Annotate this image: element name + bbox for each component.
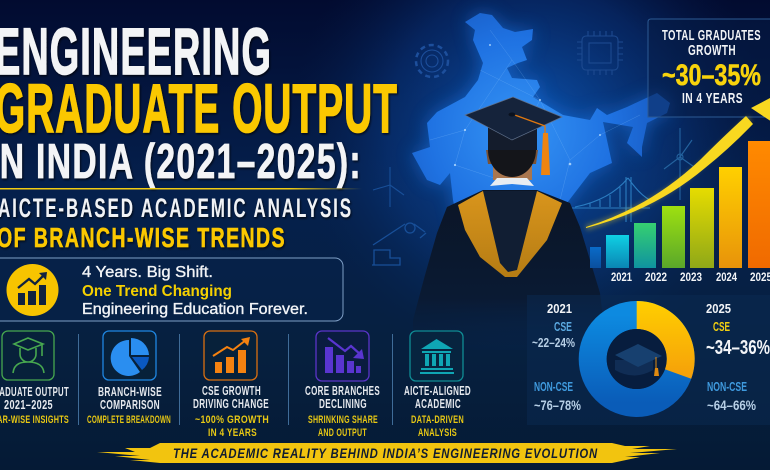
- panel: total graduates growth: [648, 19, 770, 117]
- donut chart: [593, 301, 695, 403]
- subtitle: [0, 193, 353, 253]
- bottom banner: THE ACADEMIC REALITY BEHIND INDIA’S ENGINEERING EVOLUTION: [173, 445, 598, 461]
- icon: gear outline: [416, 45, 448, 77]
- icon: institution: [410, 331, 463, 381]
- icon: rising bars: [204, 331, 257, 380]
- ears: [486, 150, 538, 164]
- icon: pie chart: [103, 331, 156, 380]
- 2021 cse value: ~22–24%: [532, 335, 575, 350]
- callout line 2: One Trend Changing: [82, 283, 232, 300]
- feature: core branches: [305, 331, 380, 439]
- sublabel: IN 4 YEARS: [208, 427, 257, 439]
- gown: [413, 190, 606, 345]
- sublabel: DATA-DRIVEN: [411, 414, 464, 426]
- icon: wind turbine right: [664, 128, 697, 200]
- 2021 non-cse label: NON-CSE: [534, 379, 573, 394]
- head hair: [488, 123, 536, 177]
- 2021 year: 2021: [547, 301, 572, 316]
- 2025 non-cse label: NON-CSE: [707, 379, 747, 394]
- growth arrow: [586, 97, 770, 228]
- tassel: [541, 133, 550, 175]
- year labels: 2021: [611, 272, 632, 284]
- 2021 non-cse value: ~76–78%: [534, 397, 581, 413]
- gold hood: [458, 191, 562, 277]
- collar: [490, 178, 534, 186]
- 2021 cse label: CSE: [554, 319, 572, 334]
- year labels: [611, 272, 770, 284]
- cap band: [488, 125, 537, 150]
- sublabel: ANALYSIS: [418, 427, 457, 439]
- subtitle line 1: AICTE-BASED ACADEMIC ANALYSIS: [0, 193, 353, 223]
- panel line 2: GROWTH: [688, 43, 736, 59]
- label: COMPARISON: [100, 398, 160, 412]
- year labels: 2023: [680, 272, 702, 284]
- year labels: 2024: [716, 272, 737, 284]
- year labels: 2022: [645, 272, 667, 284]
- callout box: [0, 258, 343, 321]
- India map: [412, 13, 670, 290]
- callout line 1: 4 Years. Big Shift.: [82, 264, 213, 281]
- panel line 4: IN 4 YEARS: [682, 91, 743, 107]
- mortarboard: [465, 97, 562, 140]
- sublabel: ~100% GROWTH: [195, 414, 269, 426]
- 2025 non-cse value: ~64–66%: [707, 397, 756, 413]
- icon: wind turbine left: [373, 167, 404, 207]
- gown centre back: [483, 191, 537, 272]
- sublabel: SHRINKING SHARE: [308, 414, 378, 426]
- sublabel: COMPLETE BREAKDOWN: [87, 414, 171, 426]
- 2025 cse label: CSE: [713, 319, 730, 334]
- bottom banner: [97, 443, 677, 463]
- title: [0, 14, 398, 189]
- icon: falling bars: [316, 331, 369, 381]
- icon: microchip outline: [577, 31, 623, 75]
- icon: robot arm: [372, 223, 426, 265]
- callout line 3: Engineering Education Forever.: [82, 301, 308, 318]
- feature: graduate output: [0, 331, 69, 426]
- icon: growth chart badge: [6, 264, 58, 316]
- icon: cap in donut: [615, 344, 662, 376]
- label: 2021–2025: [4, 398, 53, 412]
- cord: [512, 114, 545, 133]
- panel: cse share donut: [527, 295, 770, 425]
- feature: cse growth: [193, 331, 269, 439]
- label: DRIVING CHANGE: [193, 397, 269, 411]
- label: CSE GROWTH: [202, 384, 261, 398]
- label: BRANCH-WISE: [98, 385, 162, 399]
- neck: [493, 165, 532, 180]
- label: ACADEMIC: [415, 397, 461, 411]
- label: CORE BRANCHES: [305, 384, 380, 398]
- label: AICTE-ALIGNED: [404, 384, 471, 398]
- column dividers: [78, 334, 392, 425]
- title rule: [0, 188, 362, 190]
- label: DECLINING: [319, 397, 367, 411]
- title line 2: GRADUATE OUTPUT: [0, 70, 398, 147]
- icon: bridge: [570, 177, 650, 222]
- cap button: [508, 112, 516, 116]
- icon: graduate: [2, 331, 54, 380]
- title line 3: IN INDIA (2021–2025):: [0, 135, 362, 189]
- sublabel: AND OUTPUT: [318, 427, 367, 439]
- feature: aicte academic: [404, 331, 471, 439]
- feature: branch comparison: [87, 331, 171, 426]
- bar chart: [590, 141, 770, 284]
- 2025 year: 2025: [706, 301, 731, 316]
- graduate figure: [413, 97, 606, 345]
- subtitle line 2: OF BRANCH-WISE TRENDS: [0, 222, 286, 253]
- title line 1: ENGINEERING: [0, 14, 272, 88]
